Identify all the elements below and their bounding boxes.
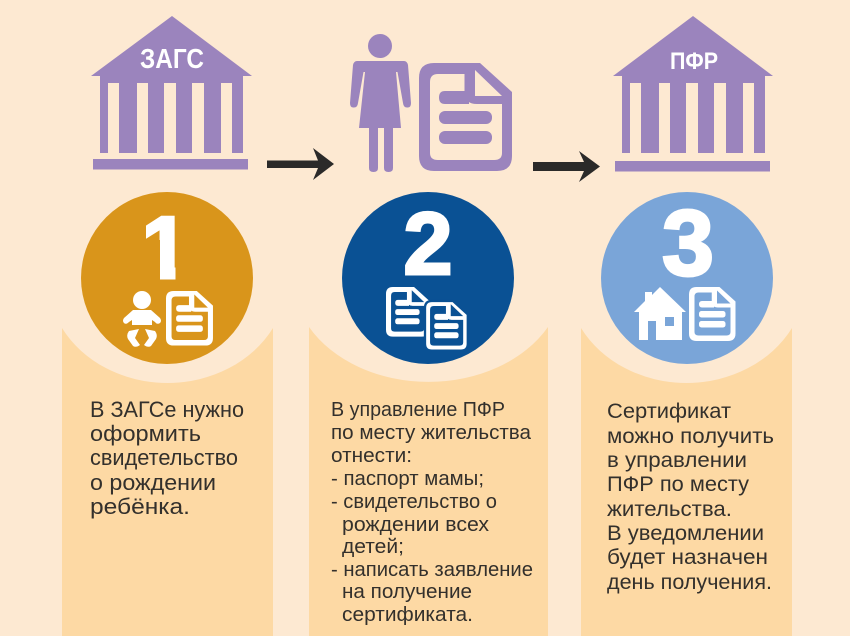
- text block: step 1: оформить: [90, 421, 201, 446]
- text block: step 3: в управлении: [607, 449, 747, 472]
- arrow: step 2 to step 3: [533, 151, 600, 182]
- icon: house: [634, 287, 686, 340]
- icon: document: [689, 287, 736, 341]
- arrow: step 1 to step 2: [267, 148, 334, 180]
- text block: step 2: - свидетельство о: [331, 491, 497, 513]
- icon: woman: [350, 34, 411, 172]
- text block: step 3: день получения.: [607, 571, 772, 594]
- text block: step 2: рождении всех: [342, 514, 489, 536]
- text block: step 3: Сертификат: [607, 400, 731, 423]
- text block: step 2: - паспорт мамы;: [331, 468, 484, 490]
- number 2: 2: [404, 194, 452, 293]
- text block: step 1: [90, 397, 244, 519]
- text block: step 3: ПФР по месту: [607, 473, 750, 496]
- text block: step 3: [607, 400, 774, 594]
- text block: step 2: В управление ПФР: [331, 399, 505, 421]
- building label: ZAGS: ЗАГС: [140, 43, 204, 74]
- text block: step 3: будет назначен: [607, 546, 768, 569]
- text block: step 3: жительства.: [607, 498, 732, 521]
- icon: PFR building: [613, 16, 773, 172]
- text block: step 1: свидетельство: [90, 445, 238, 470]
- panel: step 1 background: [62, 328, 273, 636]
- text block: step 2: на получение: [342, 581, 472, 603]
- text block: step 3: В уведомлении: [607, 522, 764, 545]
- icon: baby: [123, 291, 161, 347]
- text block: step 3: можно получить: [607, 425, 774, 448]
- number 1: 1: [141, 198, 189, 297]
- step 1 badge: [81, 192, 253, 364]
- text block: step 2: - написать заявление: [331, 559, 533, 581]
- building label: PFR: ПФР: [670, 48, 718, 75]
- text block: step 2: сертификата.: [342, 604, 473, 626]
- icon: document: [166, 291, 213, 346]
- text block: step 2: отнести:: [331, 445, 412, 467]
- panel: step 3 background: [581, 328, 792, 636]
- text block: step 1: о рождении: [90, 470, 216, 495]
- icon: document back: [386, 287, 429, 337]
- icon: ZAGS building: [91, 16, 252, 170]
- text block: step 1: В ЗАГСе нужно: [90, 397, 244, 422]
- icon: document front: [425, 301, 468, 351]
- number 3: 3: [662, 191, 714, 295]
- step 2 badge: [342, 192, 514, 364]
- text block: step 2: детей;: [342, 536, 404, 558]
- panel: step 2 background: [309, 327, 548, 636]
- step 3 badge: [601, 191, 773, 364]
- text block: step 1: ребёнка.: [90, 494, 190, 519]
- icon: document large: [419, 63, 512, 171]
- text block: step 2: по месту жительства: [331, 422, 532, 444]
- text block: step 2: [331, 399, 533, 626]
